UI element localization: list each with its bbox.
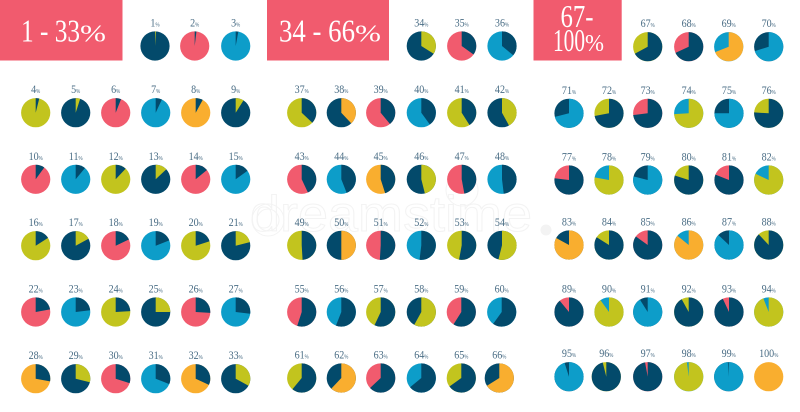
pie 31% bbox=[141, 349, 170, 393]
pie 55%: 55% bbox=[295, 283, 309, 296]
pie 44%: 44% bbox=[334, 150, 349, 163]
pie 45% bbox=[366, 150, 395, 194]
pie 30% bbox=[101, 349, 130, 393]
pie 39% bbox=[366, 83, 395, 127]
pie 6%: 6% bbox=[111, 83, 121, 96]
pie 100% bbox=[754, 347, 783, 391]
pie 37% bbox=[287, 83, 316, 127]
pie 7%: 7% bbox=[151, 83, 161, 96]
pie 84%: 84% bbox=[602, 216, 617, 229]
pie 66%: 66% bbox=[492, 349, 507, 362]
pie 63%: 63% bbox=[374, 349, 388, 362]
pie 72% bbox=[594, 84, 624, 128]
pie 86% bbox=[674, 216, 703, 260]
pie 26% bbox=[181, 283, 210, 327]
pie 11% bbox=[61, 150, 90, 194]
pie 51%: 51% bbox=[374, 216, 388, 229]
pie 36%: 36% bbox=[495, 17, 510, 30]
pie 87%: 87% bbox=[722, 216, 737, 229]
pie 68%: 68% bbox=[682, 17, 696, 30]
pie 90%: 90% bbox=[602, 283, 617, 296]
pie 18%: 18% bbox=[109, 216, 123, 229]
heading: 67-100%: % bbox=[585, 31, 604, 57]
pie 95%: 95% bbox=[562, 347, 577, 360]
pie 25% bbox=[141, 283, 170, 327]
pie 14% bbox=[181, 150, 210, 194]
pie 16%: 16% bbox=[29, 216, 43, 229]
pie 37%: 37% bbox=[295, 83, 309, 96]
pie 60%: 60% bbox=[495, 283, 509, 296]
pie 38%: 38% bbox=[334, 83, 349, 96]
pie 61% bbox=[287, 349, 316, 393]
pie 16% bbox=[21, 216, 50, 260]
pie 41%: 41% bbox=[455, 83, 469, 96]
pie 43%: 43% bbox=[295, 150, 309, 163]
pie 22%: 22% bbox=[29, 283, 43, 296]
pie 42% bbox=[487, 83, 517, 127]
pie 81% bbox=[714, 151, 744, 195]
heading: 34 - 66%: % bbox=[355, 22, 381, 48]
pie 53% bbox=[447, 216, 476, 260]
pie 73%: 73% bbox=[641, 84, 655, 97]
pie 98% bbox=[674, 347, 703, 391]
pie 1% bbox=[140, 17, 170, 61]
pie 7% bbox=[141, 83, 170, 127]
pie 64%: 64% bbox=[414, 349, 429, 362]
heading: 67-100%: 100 bbox=[553, 22, 585, 58]
pie 85% bbox=[633, 216, 662, 260]
pie 76% bbox=[754, 84, 783, 128]
heading: 34 - 66% bbox=[267, 0, 389, 60]
pie 70%: 70% bbox=[762, 17, 776, 30]
pie 76%: 76% bbox=[762, 84, 776, 97]
pie 62% bbox=[327, 349, 356, 393]
pie 86%: 86% bbox=[682, 216, 696, 229]
pie 13%: 13% bbox=[149, 150, 163, 163]
pie 60% bbox=[487, 283, 516, 327]
pie 72%: 72% bbox=[602, 84, 617, 97]
pie 99%: 99% bbox=[722, 347, 736, 360]
pie 91%: 91% bbox=[641, 283, 655, 296]
pie 75%: 75% bbox=[722, 84, 737, 97]
pie 58% bbox=[407, 283, 436, 327]
pie 73% bbox=[633, 84, 662, 128]
pie 94% bbox=[754, 283, 783, 327]
pie 53%: 53% bbox=[455, 216, 469, 229]
pie 47% bbox=[447, 150, 476, 194]
pie 43% bbox=[287, 150, 316, 194]
pie 79%: 79% bbox=[641, 151, 655, 164]
pie 87% bbox=[714, 216, 744, 260]
pie 28%: 28% bbox=[29, 349, 43, 362]
pie 80% bbox=[674, 151, 703, 195]
pie 33%: 33% bbox=[229, 349, 243, 362]
heading: 1 - 33%: % bbox=[80, 22, 106, 48]
pie 31%: 31% bbox=[149, 349, 163, 362]
pie 56% bbox=[327, 283, 356, 327]
pie 19%: 19% bbox=[149, 216, 163, 229]
pie 74%: 74% bbox=[682, 84, 696, 97]
pie 9% bbox=[221, 83, 250, 127]
pie 66% bbox=[485, 349, 514, 393]
pie 57% bbox=[366, 283, 395, 327]
text: dreamstime bbox=[250, 186, 532, 242]
pie 35%: 35% bbox=[455, 17, 469, 30]
pie 79% bbox=[633, 151, 662, 195]
pie 9%: 9% bbox=[231, 83, 241, 96]
pie 48% bbox=[487, 150, 517, 194]
pie 26%: 26% bbox=[189, 283, 203, 296]
pie 2%: 2% bbox=[190, 17, 200, 30]
pie 12%: 12% bbox=[109, 150, 123, 163]
pie 20%: 20% bbox=[189, 216, 203, 229]
pie 45%: 45% bbox=[374, 150, 388, 163]
pie 82%: 82% bbox=[762, 151, 776, 164]
pie 93%: 93% bbox=[722, 283, 737, 296]
pie 89%: 89% bbox=[562, 283, 577, 296]
pie 15% bbox=[221, 150, 250, 194]
pie 78% bbox=[594, 151, 624, 195]
pie 92%: 92% bbox=[682, 283, 696, 296]
pie 40% bbox=[407, 83, 436, 127]
pie 46%: 46% bbox=[414, 150, 429, 163]
pie 4% bbox=[21, 83, 50, 127]
pie 18% bbox=[101, 216, 130, 260]
pie 46% bbox=[407, 150, 436, 194]
pie 88% bbox=[754, 216, 783, 260]
pie 70% bbox=[754, 17, 783, 61]
pie 48%: 48% bbox=[495, 150, 510, 163]
pie 63% bbox=[366, 349, 395, 393]
pie 67%: 67% bbox=[641, 17, 655, 30]
pie 10% bbox=[21, 150, 50, 194]
pie 30%: 30% bbox=[109, 349, 123, 362]
pie 80%: 80% bbox=[682, 151, 696, 164]
pie 32% bbox=[181, 349, 210, 393]
heading: 1 - 33%: 1 - 33 bbox=[21, 12, 80, 48]
pie 38% bbox=[327, 83, 356, 127]
pie 55% bbox=[287, 283, 316, 327]
pie 71% bbox=[554, 84, 584, 128]
pie 32%: 32% bbox=[189, 349, 203, 362]
pie 96% bbox=[592, 347, 621, 391]
pie 95% bbox=[554, 347, 584, 391]
pie 83% bbox=[554, 216, 584, 260]
pie 89% bbox=[554, 283, 584, 327]
pie 75% bbox=[714, 84, 744, 128]
pie 57%: 57% bbox=[374, 283, 388, 296]
pie 69%: 69% bbox=[722, 17, 736, 30]
pie 24% bbox=[101, 283, 130, 327]
pie 54%: 54% bbox=[495, 216, 510, 229]
pie 36% bbox=[487, 17, 517, 61]
pie 27%: 27% bbox=[229, 283, 243, 296]
heading: 67-100% bbox=[534, 0, 622, 60]
pie 85%: 85% bbox=[641, 216, 655, 229]
pie 23% bbox=[61, 283, 90, 327]
heading: 34 - 66%: 34 - 66 bbox=[279, 12, 355, 48]
pie 52% bbox=[407, 216, 436, 260]
pie 4%: 4% bbox=[31, 83, 41, 96]
pie 29% bbox=[61, 349, 90, 393]
pie 93% bbox=[714, 283, 744, 327]
pie 97% bbox=[633, 347, 662, 391]
pie 51% bbox=[366, 216, 395, 260]
pie 21% bbox=[221, 216, 250, 260]
pie 94%: 94% bbox=[762, 283, 776, 296]
pie 67% bbox=[633, 17, 662, 61]
pie 82% bbox=[754, 151, 783, 195]
pie 23%: 23% bbox=[69, 283, 83, 296]
pie 49% bbox=[287, 216, 316, 260]
pie 3% bbox=[221, 17, 250, 61]
pie 33% bbox=[221, 349, 250, 393]
pie 20% bbox=[181, 216, 210, 260]
pie 14%: 14% bbox=[189, 150, 203, 163]
pie 52%: 52% bbox=[414, 216, 429, 229]
pie 5% bbox=[61, 83, 90, 127]
pie 15%: 15% bbox=[229, 150, 243, 163]
pie 2% bbox=[180, 17, 209, 61]
pie 10%: 10% bbox=[29, 150, 43, 163]
pie 24%: 24% bbox=[109, 283, 123, 296]
pie 5%: 5% bbox=[71, 83, 81, 96]
pie 44% bbox=[327, 150, 356, 194]
pie 40%: 40% bbox=[414, 83, 429, 96]
pie 100%: 100% bbox=[759, 347, 779, 360]
pie 34%: 34% bbox=[414, 17, 429, 30]
pie 13% bbox=[141, 150, 170, 194]
pie 8% bbox=[181, 83, 210, 127]
pie 78%: 78% bbox=[602, 151, 617, 164]
pie 17%: 17% bbox=[69, 216, 83, 229]
pie 81%: 81% bbox=[722, 151, 737, 164]
pie 17% bbox=[61, 216, 90, 260]
pie 83%: 83% bbox=[562, 216, 577, 229]
pie 74% bbox=[674, 84, 703, 128]
pie 22% bbox=[21, 283, 50, 327]
pie 27% bbox=[221, 283, 250, 327]
pie 90% bbox=[594, 283, 624, 327]
pie 58%: 58% bbox=[414, 283, 429, 296]
pie 25%: 25% bbox=[149, 283, 163, 296]
pie 99% bbox=[714, 347, 743, 391]
pie 28% bbox=[21, 349, 50, 393]
pie 65%: 65% bbox=[454, 349, 469, 362]
pie 29%: 29% bbox=[69, 349, 83, 362]
pie 8%: 8% bbox=[191, 83, 201, 96]
pie 71%: 71% bbox=[562, 84, 577, 97]
pie 21%: 21% bbox=[229, 216, 243, 229]
pie 98%: 98% bbox=[682, 347, 696, 360]
pie 34% bbox=[407, 17, 436, 61]
pie 49%: 49% bbox=[295, 216, 309, 229]
pie 56%: 56% bbox=[334, 283, 349, 296]
pie 42%: 42% bbox=[495, 83, 510, 96]
pie 1%: 1% bbox=[150, 17, 160, 30]
pie 64% bbox=[407, 349, 436, 393]
pie 3%: 3% bbox=[231, 17, 241, 30]
pie 77% bbox=[554, 151, 584, 195]
pie 77%: 77% bbox=[562, 151, 577, 164]
pie 11%: 11% bbox=[69, 150, 83, 163]
pie 65% bbox=[447, 349, 476, 393]
pie 47%: 47% bbox=[455, 150, 469, 163]
pie 61%: 61% bbox=[295, 349, 309, 362]
pie 59%: 59% bbox=[454, 283, 469, 296]
pie 96%: 96% bbox=[599, 347, 614, 360]
pie 41% bbox=[447, 83, 476, 127]
pie 88%: 88% bbox=[762, 216, 776, 229]
pie 68% bbox=[674, 17, 703, 61]
pie 59% bbox=[447, 283, 476, 327]
pie 62%: 62% bbox=[334, 349, 349, 362]
pie 35% bbox=[447, 17, 476, 61]
pie 50%: 50% bbox=[334, 216, 349, 229]
heading: 1 - 33% bbox=[0, 0, 122, 60]
pie 91% bbox=[633, 283, 662, 327]
pie 54% bbox=[487, 216, 517, 260]
pie 84% bbox=[594, 216, 624, 260]
pie 6% bbox=[101, 83, 130, 127]
pie 50% bbox=[327, 216, 356, 260]
pie 39%: 39% bbox=[374, 83, 388, 96]
pie 97%: 97% bbox=[641, 347, 655, 360]
pie 12% bbox=[101, 150, 130, 194]
pie 19% bbox=[141, 216, 170, 260]
pie 69% bbox=[714, 17, 743, 61]
pie 92% bbox=[674, 283, 703, 327]
